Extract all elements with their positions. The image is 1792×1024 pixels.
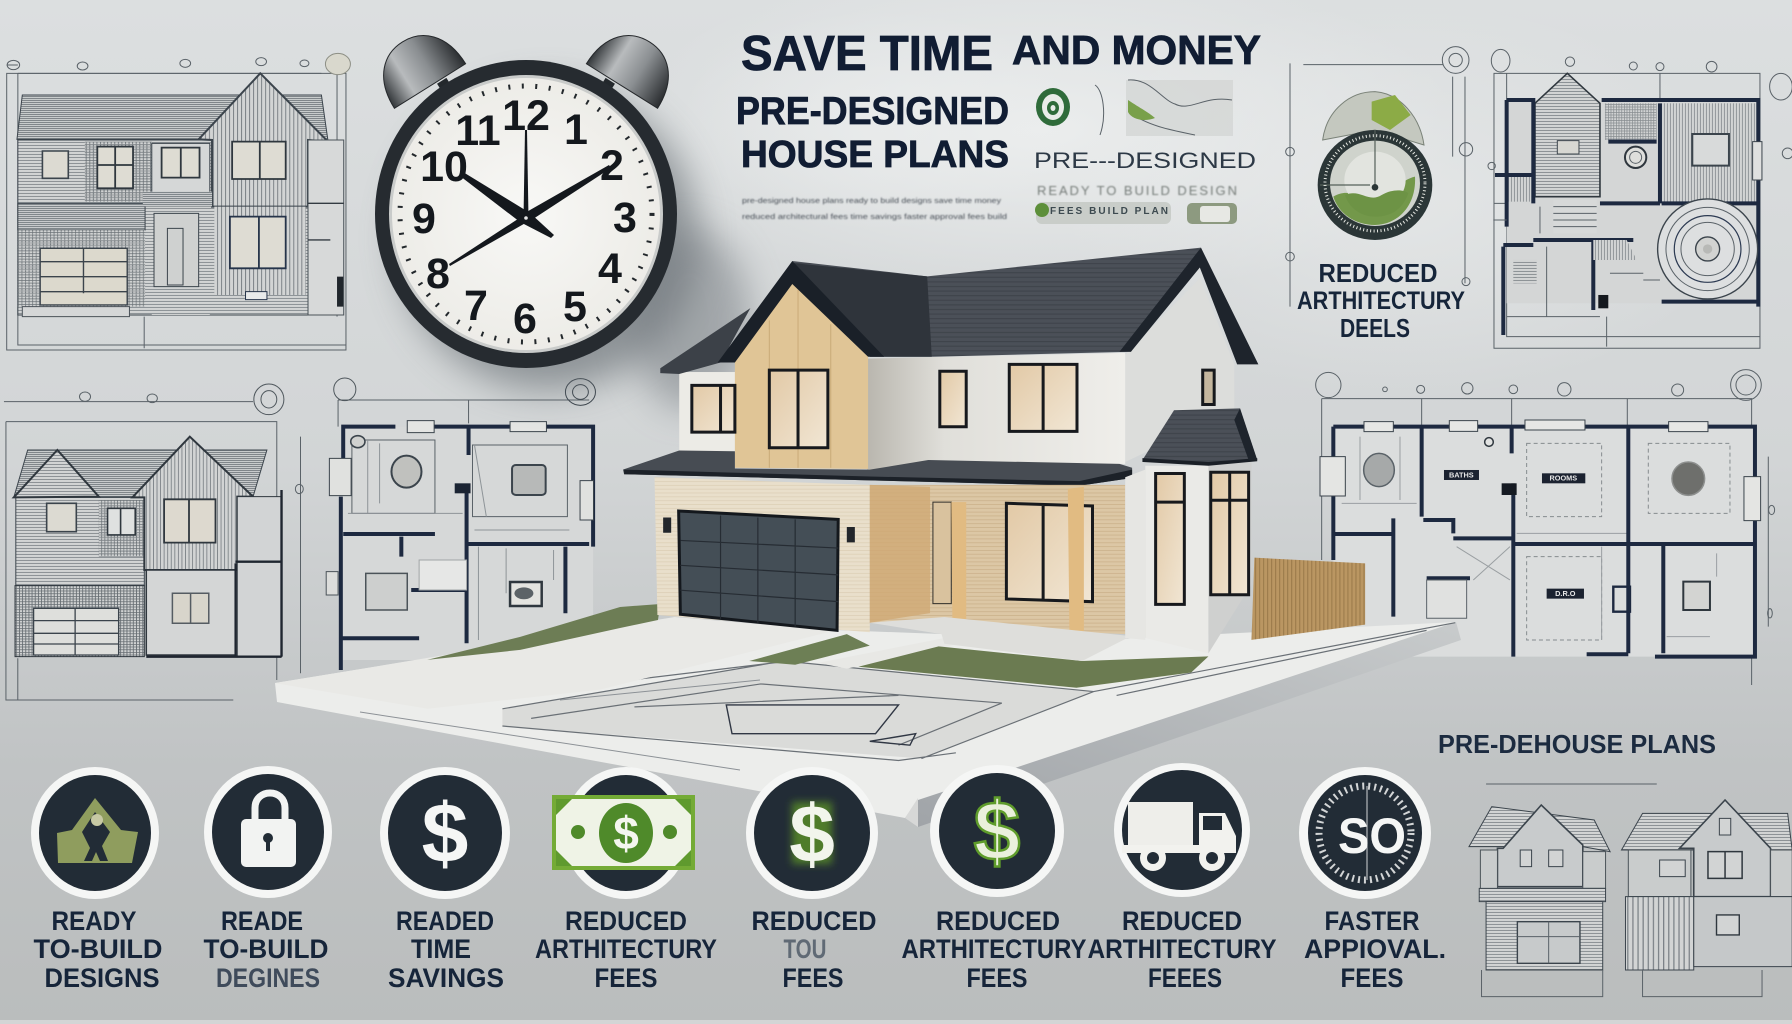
icon: dollar bill: [552, 767, 695, 899]
lower wall: [146, 570, 235, 655]
lawn left: [427, 604, 660, 660]
panel: middle-left floor plan: [326, 378, 595, 670]
garage brick: [15, 586, 144, 657]
tick marks: [400, 86, 652, 342]
front gable siding: [132, 437, 253, 570]
icon: dollar sign on green: [746, 767, 878, 899]
walls: [1495, 100, 1758, 335]
side wall: [1125, 278, 1234, 462]
label: ready to-build designs: READY: [52, 906, 136, 936]
icon: right alarm bell: [586, 20, 685, 108]
hatched rooms: [1535, 73, 1600, 197]
label: readed time savings: [388, 906, 504, 993]
icon: green outlined dollar: [930, 765, 1064, 897]
clock numerals: 5: [563, 283, 587, 331]
lawn center: [749, 634, 870, 665]
left upper white wall: [679, 372, 737, 452]
label: faster approval fees: FEES: [1340, 963, 1404, 993]
porch roof: [623, 450, 1132, 486]
left lower roof: [660, 308, 750, 374]
subheading: PRE---DESIGNED: [1034, 148, 1256, 173]
label: reduced arthitectury fees three: REDUCED: [1122, 906, 1242, 936]
front door: [154, 213, 199, 287]
label: ready to-build designs: TO-BUILD: [34, 934, 162, 964]
walls: [341, 427, 593, 670]
garage door: [40, 248, 127, 305]
icon: seal with SO: SO: [1338, 808, 1406, 864]
body siding: [16, 497, 144, 586]
fixtures: [1364, 453, 1394, 487]
panel: middle-left house elevation blueprint: [4, 384, 303, 700]
icon: left alarm bell: [367, 20, 466, 108]
soft shadows behind clock and house: [398, 86, 750, 410]
label: readed time savings: SAVINGS: [388, 963, 504, 993]
clock: [367, 20, 685, 368]
garage door: [679, 511, 838, 630]
sketch house two: [1621, 800, 1792, 997]
right callout text: ARTHITECTURY: [1297, 287, 1465, 315]
icon: padlock: [204, 766, 332, 898]
sheet sketch drawing: [502, 623, 1455, 760]
porch roof: [18, 203, 145, 230]
clock numerals: 6: [513, 295, 537, 343]
porch brick wall: [870, 485, 1125, 634]
clock numerals: [412, 92, 637, 343]
label: reduced arthitectury fees three: ARTHITECTURY: [1088, 934, 1276, 964]
wall lamps: [663, 517, 855, 542]
upper windows: [692, 364, 1214, 448]
driveway: [275, 617, 835, 709]
faded text rows: READY TO BUILD DESIGN: [1037, 183, 1237, 198]
label: reduced arthitectury fees three: FEEES: [1148, 963, 1222, 993]
icon row: [31, 763, 1431, 899]
walkway: [818, 638, 967, 669]
clock numerals: 3: [613, 194, 637, 242]
label: reade to-build degines: READE: [221, 906, 303, 936]
porch posts: [951, 502, 966, 628]
clock numerals: 8: [426, 250, 450, 298]
icon: dollar sign: [380, 767, 510, 899]
label: faster approval fees: [1304, 906, 1446, 993]
small label tags: ROOMS: [1549, 474, 1577, 483]
right callout text: REDUCED: [1318, 258, 1438, 288]
small caption lines: [742, 198, 1007, 221]
icon: dollar bill: $: [613, 807, 639, 859]
icon: green swirl logo: [1036, 88, 1070, 126]
label: reduced arthitectury fees one: [535, 906, 717, 993]
body siding: [18, 140, 308, 315]
clock numerals: 1: [564, 106, 588, 154]
roof: [14, 450, 267, 497]
title: [680, 10, 1261, 230]
clock numerals: 2: [600, 142, 624, 190]
icon labels: [34, 906, 1446, 993]
bay roof: [1142, 408, 1257, 465]
icon: dollar sign on green: $: [789, 789, 835, 880]
panel: top-left house elevation blueprint: [7, 53, 350, 350]
icon: ready-to-build house: [31, 767, 159, 899]
label: ready to-build designs: [34, 906, 162, 993]
sketch house one: [1469, 805, 1610, 997]
tan gable: [735, 283, 868, 469]
label: reade to-build degines: TO-BUILD: [204, 934, 328, 964]
title: PRE-DESIGNED: [736, 90, 1009, 133]
panel: top-right floor plan blueprint: [1488, 49, 1792, 348]
icon: dollar sign: $: [422, 786, 468, 880]
faded text rows: FEES BUILD PLAN: [1050, 206, 1168, 217]
label: reduced tou fees: REDUCED: [752, 906, 876, 936]
left fascia: [718, 261, 884, 362]
title: AND MONEY: [1012, 27, 1261, 73]
main upper wall: [867, 353, 1125, 470]
panel: wide floor plan blueprint: [1316, 370, 1775, 685]
label: faster approval fees: FASTER: [1324, 906, 1420, 936]
windows: [42, 151, 68, 178]
clock numerals: 4: [598, 245, 622, 293]
right fascia: [1119, 248, 1258, 364]
garage brick wall: [655, 477, 870, 632]
blueprint sheet base: [275, 622, 1461, 827]
label: reduced tou fees: TOU: [784, 934, 826, 964]
icon: delivery truck: [1114, 763, 1250, 897]
small label tags: [1444, 470, 1585, 599]
label: reduced arthitectury fees one: ARTHITECTURY: [535, 934, 717, 964]
clock numerals: 12: [502, 92, 550, 140]
small caption lines: pre-designed house plans ready to build designs save time money: [742, 198, 1002, 205]
right callout text: [1297, 258, 1465, 343]
label: ready to-build designs: DESIGNS: [44, 963, 160, 993]
faded text rows: [1035, 183, 1237, 224]
label: reduced tou fees: FEES: [782, 963, 844, 993]
label: reduced arthitectury fees two: REDUCED: [936, 906, 1060, 936]
icon: seal with SO: [1299, 767, 1431, 899]
clock hands: [449, 130, 611, 266]
label: reade to-build degines: [204, 906, 328, 993]
panel: right frame with gauge graphic: [1286, 47, 1473, 307]
clock numerals: 10: [420, 143, 468, 191]
bay window front: [1145, 466, 1208, 653]
small label tags: BATHS: [1449, 470, 1474, 479]
clock numerals: 7: [464, 282, 488, 330]
label: reduced arthitectury fees two: [902, 906, 1086, 993]
label: reade to-build degines: DEGINES: [216, 963, 320, 993]
title: SAVE TIME: [741, 27, 993, 81]
label: reduced tou fees: [752, 906, 876, 993]
label: reduced arthitectury fees three: [1088, 906, 1276, 993]
side wall lower: [1125, 470, 1145, 640]
fence: [1251, 558, 1365, 640]
porch floor: [870, 617, 1131, 661]
right callout text: DEELS: [1340, 313, 1410, 343]
label: readed time savings: TIME: [411, 934, 471, 964]
small caption lines: reduced architectural fees time savings faster approval fees build: [742, 214, 1007, 221]
roof: [17, 95, 328, 142]
lower door and window: [933, 502, 1092, 604]
small label tags: D.R.O: [1555, 589, 1576, 598]
lower right caption: PRE-DEHOUSE PLANS: [1438, 729, 1716, 759]
lawn right: [858, 646, 1208, 688]
label: faster approval fees: APPIOVAL.: [1304, 934, 1446, 964]
concentric rings: [1658, 199, 1758, 299]
icon: green outlined dollar: $: [974, 784, 1020, 878]
house: [275, 248, 1365, 709]
main roof: [792, 248, 1201, 357]
walls: [1333, 427, 1755, 657]
title: HOUSE PLANS: [741, 134, 1009, 176]
label: reduced arthitectury fees one: FEES: [594, 963, 658, 993]
panel: lower-right house sketches: [1469, 784, 1792, 997]
front gable: [199, 73, 328, 207]
icon: sketch emblem: [1095, 80, 1233, 136]
label: reduced arthitectury fees two: ARTHITECTURY: [902, 934, 1086, 964]
icon: gauge dial: [1318, 92, 1432, 240]
clock numerals: 11: [455, 107, 501, 155]
label: readed time savings: READED: [396, 906, 494, 936]
label: reduced arthitectury fees one: REDUCED: [565, 906, 687, 936]
windows: [47, 503, 76, 532]
label: reduced arthitectury fees two: FEES: [966, 963, 1028, 993]
clock numerals: 9: [412, 195, 436, 243]
